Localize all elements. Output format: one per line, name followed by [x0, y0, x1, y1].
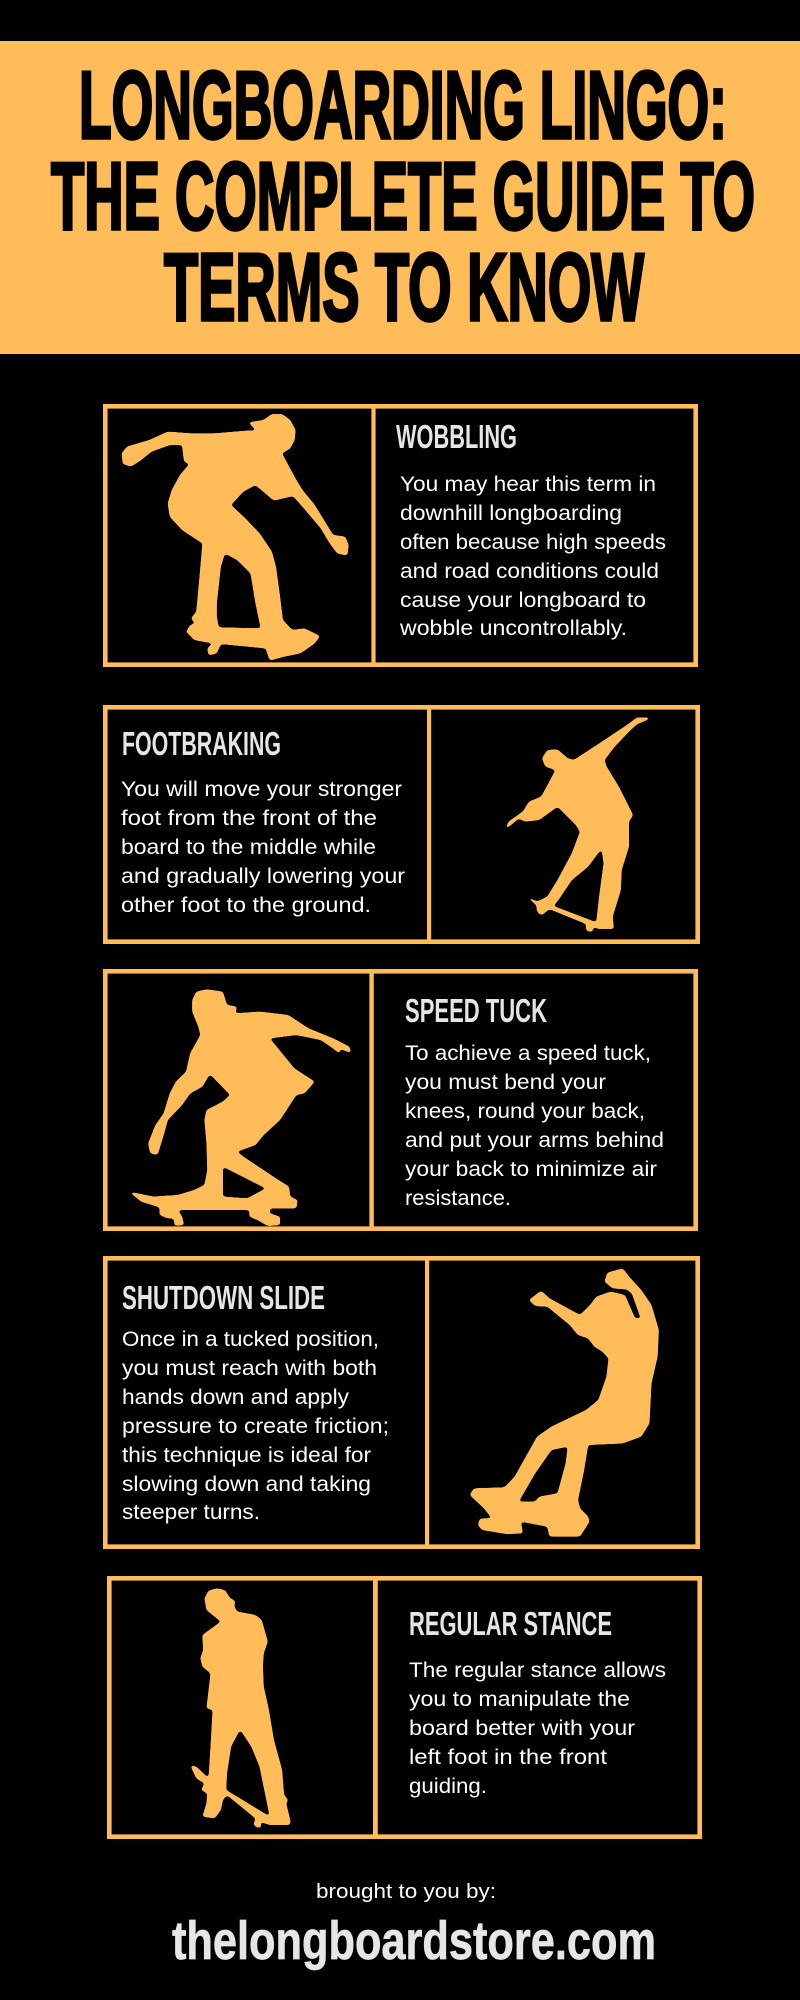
- heading: shutdown slide: SHUTDOWN SLIDE: [122, 1279, 325, 1316]
- text block: shutdown slide: hands down and apply: [122, 1385, 349, 1409]
- text block: speed tuck: [405, 1041, 664, 1210]
- text block: shutdown slide: steeper turns.: [122, 1500, 260, 1524]
- footer website: thelongboardstore.com: [172, 1911, 656, 1971]
- text block: wobbling: and road conditions could: [400, 559, 659, 583]
- text block: wobbling: often because high speeds: [400, 530, 666, 554]
- panel: wobbling: [105, 404, 696, 667]
- text block: speed tuck: and put your arms behind: [405, 1128, 664, 1152]
- text block: wobbling: cause your longboard to: [400, 588, 646, 612]
- heading: wobbling: WOBBLING: [396, 418, 517, 455]
- text block: shutdown slide: you must reach with both: [122, 1356, 377, 1380]
- text block: regular stance: guiding.: [409, 1774, 487, 1798]
- text block: wobbling: downhill longboarding: [400, 501, 622, 525]
- text block: speed tuck: you must bend your: [405, 1070, 606, 1094]
- text block: shutdown slide: [122, 1327, 389, 1524]
- text block: wobbling: [399, 472, 666, 640]
- icon: skater silhouette regular stance: [190, 1588, 290, 1828]
- text block: footbraking: board to the middle while: [121, 835, 376, 859]
- text block: wobbling: wobble uncontrollably.: [399, 616, 627, 640]
- panel: footbraking: [105, 705, 698, 944]
- text block: shutdown slide: slowing down and taking: [122, 1472, 371, 1496]
- panel: shutdown slide: [105, 1256, 698, 1549]
- text block: speed tuck: To achieve a speed tuck,: [405, 1041, 651, 1065]
- icon: skater silhouette speed tuck: [129, 989, 351, 1226]
- text block: shutdown slide: Once in a tucked position,: [122, 1327, 379, 1351]
- text block: regular stance: you to manipulate the: [409, 1687, 630, 1711]
- text block: wobbling: You may hear this term in: [400, 472, 656, 496]
- text block: footbraking: [121, 777, 405, 917]
- icon: skater silhouette footbraking: [504, 717, 651, 932]
- text block: regular stance: left foot in the front: [409, 1745, 607, 1769]
- header banner: [0, 41, 800, 354]
- text block: regular stance: [409, 1658, 666, 1798]
- heading: regular stance: REGULAR STANCE: [409, 1605, 612, 1642]
- text block: speed tuck: resistance.: [405, 1186, 511, 1210]
- text block: speed tuck: your back to minimize air: [405, 1157, 657, 1181]
- text block: regular stance: The regular stance allows: [409, 1658, 666, 1682]
- icon: skater silhouette shutdown slide: [470, 1268, 659, 1537]
- text block: regular stance: board better with your: [409, 1716, 635, 1740]
- text block: shutdown slide: this technique is ideal for: [122, 1443, 371, 1467]
- heading: footbraking: FOOTBRAKING: [122, 725, 281, 762]
- heading: speed tuck: SPEED TUCK: [405, 992, 547, 1029]
- text block: footbraking: other foot to the ground.: [121, 893, 371, 917]
- footer credit: [172, 1880, 656, 1971]
- title: [51, 52, 755, 341]
- text block: footbraking: and gradually lowering your: [121, 864, 405, 888]
- text block: shutdown slide: pressure to create friction;: [122, 1414, 389, 1438]
- text block: footbraking: foot from the front of the: [121, 806, 377, 830]
- panel: speed tuck: [105, 969, 696, 1231]
- icon: skater silhouette wobbling: [122, 414, 349, 661]
- text block: speed tuck: knees, round your back,: [405, 1099, 645, 1123]
- footer label: brought to you by:: [316, 1880, 496, 1903]
- panel: regular stance: [109, 1576, 700, 1839]
- text block: footbraking: You will move your stronger: [121, 777, 402, 801]
